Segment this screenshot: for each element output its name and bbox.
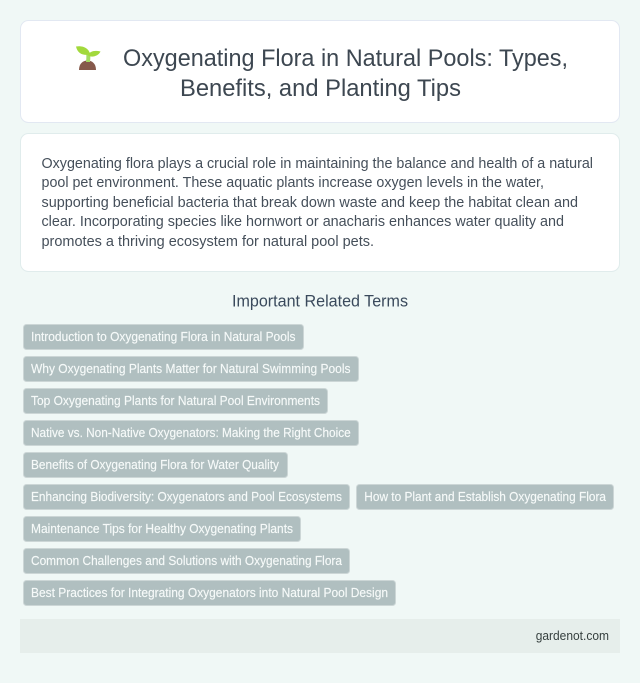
tag: benefits [24, 452, 288, 478]
tag: challenges: Common Challenges and Solutions with Oxygenating Flora [31, 554, 342, 568]
tag: how to plant [356, 484, 614, 510]
icon: seedling [76, 46, 100, 70]
paragraph text: Oxygenating flora plays a crucial role in maintaining the balance and health of a natural [42, 156, 593, 172]
paragraph text [42, 156, 593, 250]
paragraph text: supporting beneficial bacteria that break down waste and keep the habitat clean and [42, 195, 578, 211]
panel: related term tags [24, 324, 614, 606]
tag: introduction [24, 324, 304, 350]
title [123, 45, 568, 102]
paragraph text: pool pet environment. These aquatic plants increase oxygen levels in the water, [42, 175, 544, 191]
tag: introduction: Introduction to Oxygenating Flora in Natural Pools [31, 330, 296, 344]
tag: benefits: Benefits of Oxygenating Flora for Water Quality [31, 458, 280, 472]
tag: maintenance: Maintenance Tips for Healthy Oxygenating Plants [31, 522, 293, 536]
tag: enhancing biodiversity [24, 484, 350, 510]
footer source text: gardenot.com [536, 628, 609, 643]
footer [20, 619, 620, 653]
panel: title card [20, 20, 620, 122]
tag: best practices: Best Practices for Integrating Oxygenators into Natural Pool Design [31, 586, 388, 600]
tag: best practices [24, 580, 396, 606]
tag: top plants [24, 388, 328, 414]
panel: introduction paragraph [20, 134, 620, 272]
tag: how to plant: How to Plant and Establish Oxygenating Flora [364, 490, 606, 504]
tag: top plants: Top Oxygenating Plants for Natural Pool Environments [31, 394, 320, 408]
heading: important related terms: Important Related Terms [232, 292, 408, 310]
tag: native vs non-native: Native vs. Non-Native Oxygenators: Making the Right Choice [31, 426, 351, 440]
tag: maintenance [24, 516, 300, 542]
tag: enhancing biodiversity: Enhancing Biodiversity: Oxygenators and Pool Ecosystems [31, 490, 342, 504]
tag: why plants matter: Why Oxygenating Plants Matter for Natural Swimming Pools [31, 362, 350, 376]
tag: challenges [24, 548, 350, 574]
tag: why plants matter [24, 356, 358, 382]
tag: native vs non-native [24, 420, 358, 446]
title: Benefits, and Planting Tips [180, 75, 461, 102]
title: Oxygenating Flora in Natural Pools: Types, [123, 45, 568, 72]
paragraph text: promotes a thriving ecosystem for natural pool pets. [42, 234, 374, 250]
paragraph text: clear. Incorporating species like hornwort or anacharis enhances water quality and [42, 214, 564, 230]
